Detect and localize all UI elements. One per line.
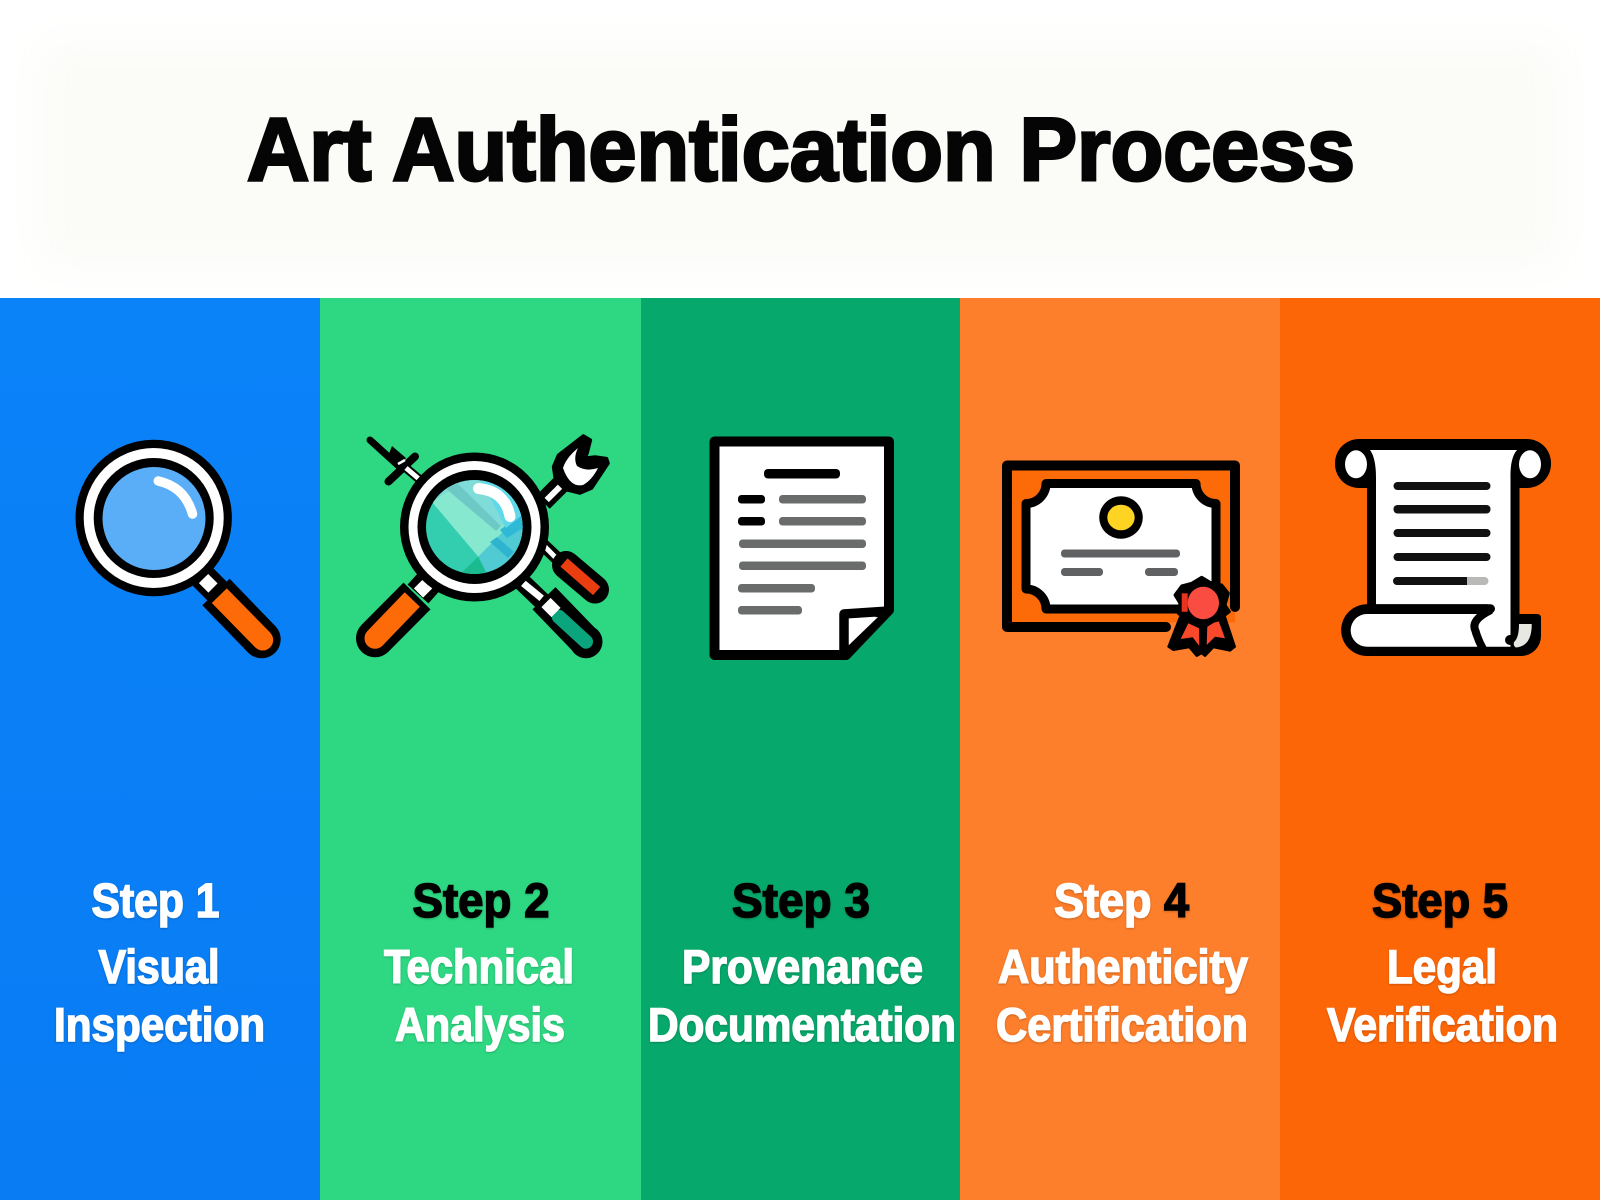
icon: magnifier with tools <box>356 436 608 658</box>
label: step 1 visual inspection <box>54 875 265 1051</box>
column background: deep orange <box>1280 298 1600 1200</box>
title: Art Authentication Process <box>247 99 1355 199</box>
panel: step 5 legal verification <box>1280 298 1600 1200</box>
label: step 3 provenance documentation: Step 3 <box>732 875 870 928</box>
label: step 3 provenance documentation: Documentation <box>648 998 956 1051</box>
column background: blue <box>0 298 320 1200</box>
wrench <box>543 436 608 502</box>
panel: step 3 provenance documentation <box>641 298 960 1200</box>
icon: document with folded corner <box>714 442 889 655</box>
label: step 1 visual inspection: Visual <box>98 940 220 993</box>
label: step 5 legal verification: Step 5 <box>1372 875 1508 928</box>
label: step 5 legal verification: Verification <box>1327 998 1558 1051</box>
pick tool <box>370 440 419 482</box>
handle: orange <box>356 574 436 657</box>
lens and ring <box>400 452 549 602</box>
label: step 2 technical analysis <box>384 875 574 1051</box>
label: step 5 legal verification <box>1327 875 1558 1051</box>
label: step 4 authenticity certification: Certification <box>996 998 1248 1051</box>
label: step 3 provenance documentation: Provenance <box>682 940 923 993</box>
top rollers <box>1335 439 1551 488</box>
label: step 4 authenticity certification: Authenticity <box>998 940 1248 993</box>
screwdriver: red <box>542 544 597 591</box>
column background: orange <box>960 298 1280 1200</box>
column background: dark green <box>641 298 960 1200</box>
panel: step 2 technical analysis <box>320 298 641 1200</box>
icon: magnifying glass <box>76 440 281 658</box>
paper <box>1367 450 1520 624</box>
icon: legal scroll <box>1335 439 1551 656</box>
label: step 5 legal verification: Legal <box>1387 940 1497 993</box>
label: step 2 technical analysis: Analysis <box>395 998 565 1051</box>
column background: light green <box>320 298 641 1200</box>
label: step 3 provenance documentation <box>648 875 956 1051</box>
label: step 2 technical analysis: Step 2 <box>412 875 550 928</box>
label: step 4 authenticity certification: Step 4 <box>1054 875 1189 928</box>
panel: step 1 visual inspection <box>0 298 320 1200</box>
bottom roll <box>1341 600 1541 656</box>
label: step 4 authenticity certification <box>996 875 1248 1051</box>
label: step 1 visual inspection: Inspection <box>54 998 265 1051</box>
screwdriver: green <box>519 579 602 658</box>
label: step 1 visual inspection: Step 1 <box>92 875 220 928</box>
header background <box>0 0 1600 298</box>
panel: step 4 authenticity certification <box>960 298 1280 1200</box>
ribbon seal <box>1168 577 1235 656</box>
label: step 2 technical analysis: Technical <box>384 940 574 993</box>
icon: certificate with ribbon seal <box>1007 466 1235 656</box>
